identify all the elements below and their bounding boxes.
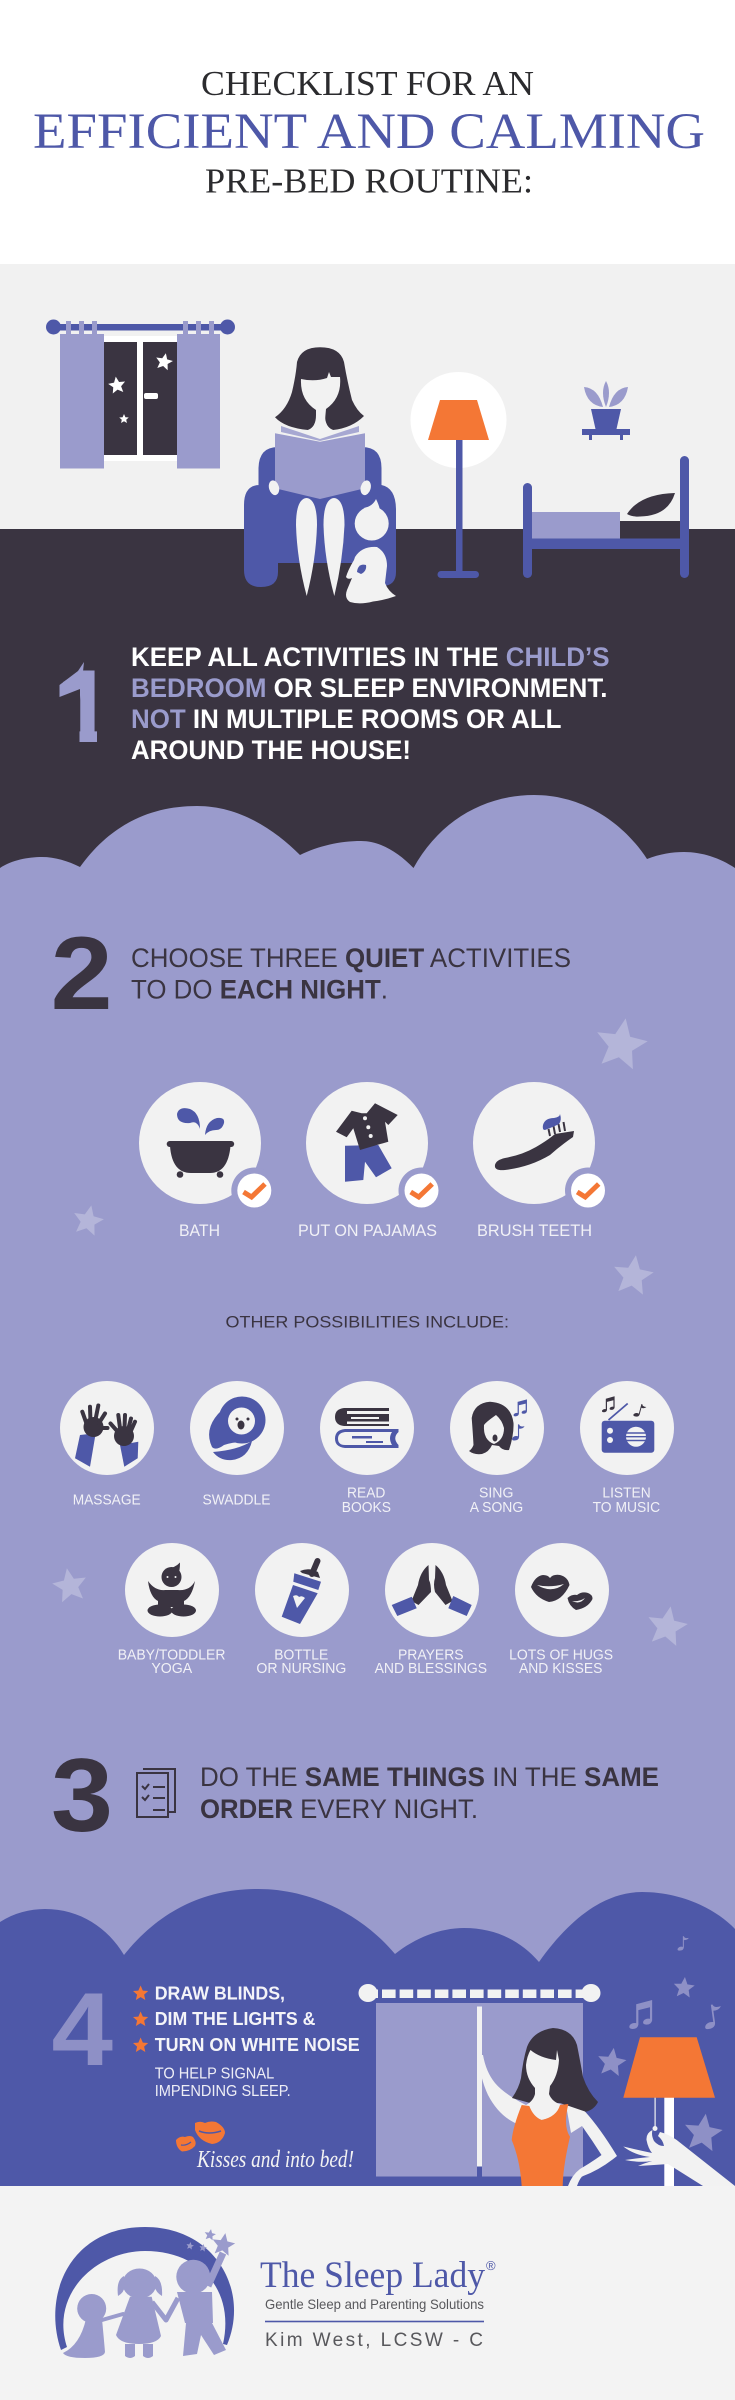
activity: hugs and kisses: LOTS OF HUGS	[509, 1647, 613, 1664]
activity: listen to music: TO MUSIC	[593, 1499, 660, 1516]
step 4 text: TURN ON WHITE NOISE	[155, 2034, 360, 2055]
activity: massage	[60, 1381, 154, 1508]
activity: brush teeth: BRUSH TEETH	[477, 1222, 592, 1240]
icon: floor lamp	[410, 372, 506, 578]
activity: swaddle	[190, 1381, 284, 1508]
activity: hugs and kisses: AND KISSES	[519, 1660, 602, 1677]
legs	[296, 498, 317, 596]
step 1 text: NOT IN MULTIPLE ROOMS OR ALL	[131, 704, 562, 734]
other arm	[566, 2105, 617, 2186]
activity: read books	[320, 1381, 414, 1516]
logo: wordmark: ®	[486, 2258, 496, 2273]
icon: orange lips	[176, 2121, 225, 2152]
step 3 text	[200, 1762, 659, 1824]
icon: checklist	[137, 1769, 175, 1817]
activity: swaddle: SWADDLE	[202, 1491, 270, 1508]
title: PRE-BED ROUTINE:	[205, 162, 533, 200]
logo: wordmark: The Sleep Lady	[260, 2255, 485, 2296]
panel: lavender cloud section	[0, 795, 735, 1970]
raised arm	[478, 2055, 530, 2125]
activity: listen to music	[580, 1381, 674, 1516]
title	[33, 64, 705, 200]
activity: bottle or nursing: BOTTLE	[274, 1647, 328, 1664]
activity: read books: BOOKS	[342, 1499, 391, 1516]
icon: curtain and rod	[358, 1984, 600, 2176]
step 2 text: CHOOSE THREE QUIET ACTIVITIES	[131, 943, 571, 973]
activity: sing a song: A SONG	[470, 1499, 523, 1516]
logo: The Sleep Lady emblem	[55, 2227, 237, 2358]
activity: prayers and blessings: AND BLESSINGS	[375, 1660, 487, 1677]
activity: bath: BATH	[179, 1222, 220, 1240]
activity: baby toddler yoga	[118, 1543, 226, 1677]
activity: baby toddler yoga: YOGA	[151, 1660, 192, 1677]
activity: read books: READ	[347, 1484, 386, 1502]
activity: bottle or nursing	[255, 1543, 349, 1677]
step 1 text	[131, 642, 610, 765]
music notes and stars	[596, 1936, 725, 2152]
children	[63, 2228, 237, 2358]
face and neck	[524, 2050, 562, 2120]
icon: bed	[523, 456, 689, 578]
panel: bedroom wall	[0, 264, 735, 529]
step 1 text: KEEP ALL ACTIVITIES IN THE CHILD’S	[131, 642, 610, 672]
step 2 text: TO DO EACH NIGHT.	[131, 975, 388, 1005]
number 2: 2	[51, 916, 113, 1032]
child	[355, 506, 389, 540]
logo: wordmark: Kim West, LCSW - C	[265, 2330, 483, 2351]
activity: hugs and kisses	[509, 1543, 613, 1677]
panel: indigo cloud section	[0, 1889, 735, 2186]
number 4: 4	[52, 1972, 113, 2088]
step 4 text: DRAW BLINDS,	[155, 1982, 285, 2004]
activity: prayers and blessings	[375, 1543, 487, 1677]
activity: sing a song: SING	[479, 1484, 513, 1502]
step 2 text	[131, 943, 571, 1005]
step 3	[51, 1738, 659, 1854]
step 4 checklist stars	[133, 1986, 148, 2052]
activity: listen to music: LISTEN	[602, 1484, 651, 1502]
hair	[275, 347, 364, 430]
closing line: Kisses and into bed!	[196, 2147, 354, 2173]
decorative stars	[50, 1014, 690, 1647]
logo: wordmark	[260, 2255, 496, 2351]
panel: dark floor and step 1 background	[0, 529, 735, 879]
activity: brush teeth	[473, 1082, 611, 1240]
activity: baby toddler yoga: BABY/TODDLER	[118, 1647, 226, 1664]
activity: pajamas	[298, 1082, 444, 1240]
step 4 text: TO HELP SIGNAL	[155, 2066, 274, 2083]
step 3 text: ORDER EVERY NIGHT.	[200, 1794, 478, 1824]
activity: bottle or nursing: OR NURSING	[256, 1660, 346, 1677]
icon: table lamp with pull cord and hand	[623, 2037, 735, 2186]
title: EFFICIENT AND CALMING	[33, 104, 705, 160]
step 1 text: BEDROOM OR SLEEP ENVIRONMENT.	[131, 673, 608, 703]
icon: window with curtains	[46, 320, 235, 468]
icon: mother reading in armchair with child	[244, 347, 396, 603]
crescent	[55, 2227, 234, 2350]
hair	[512, 2028, 598, 2112]
step 4 text	[155, 1982, 360, 2100]
step 1 text: AROUND THE HOUSE!	[131, 735, 411, 765]
orange tank top	[512, 2104, 570, 2186]
activity: sing a song	[450, 1381, 544, 1516]
activity: pajamas: PUT ON PAJAMAS	[298, 1222, 437, 1240]
armchair	[244, 447, 396, 587]
activity: bath	[139, 1082, 277, 1240]
number 3: 3	[51, 1738, 113, 1854]
step 3 text: DO THE SAME THINGS IN THE SAME	[200, 1762, 659, 1792]
title: CHECKLIST FOR AN	[201, 64, 534, 103]
panel: footer	[0, 2186, 735, 2400]
activity: prayers and blessings: PRAYERS	[398, 1647, 464, 1664]
activity: massage: MASSAGE	[73, 1491, 141, 1508]
other possibilities heading: OTHER POSSIBILITIES INCLUDE:	[226, 1314, 509, 1332]
step 4 text: IMPENDING SLEEP.	[155, 2083, 291, 2100]
icon: potted plant on shelf	[582, 381, 630, 440]
step 1	[56, 642, 610, 765]
icon: woman drawing the curtain	[478, 2028, 617, 2186]
number 1: 1	[56, 649, 114, 765]
step 4	[52, 1972, 360, 2173]
step 4 text: DIM THE LIGHTS &	[155, 2008, 316, 2029]
face and neck	[300, 372, 340, 441]
step 2	[51, 916, 571, 1032]
open book	[281, 426, 359, 441]
logo: wordmark: Gentle Sleep and Parenting Solutions	[265, 2296, 484, 2312]
